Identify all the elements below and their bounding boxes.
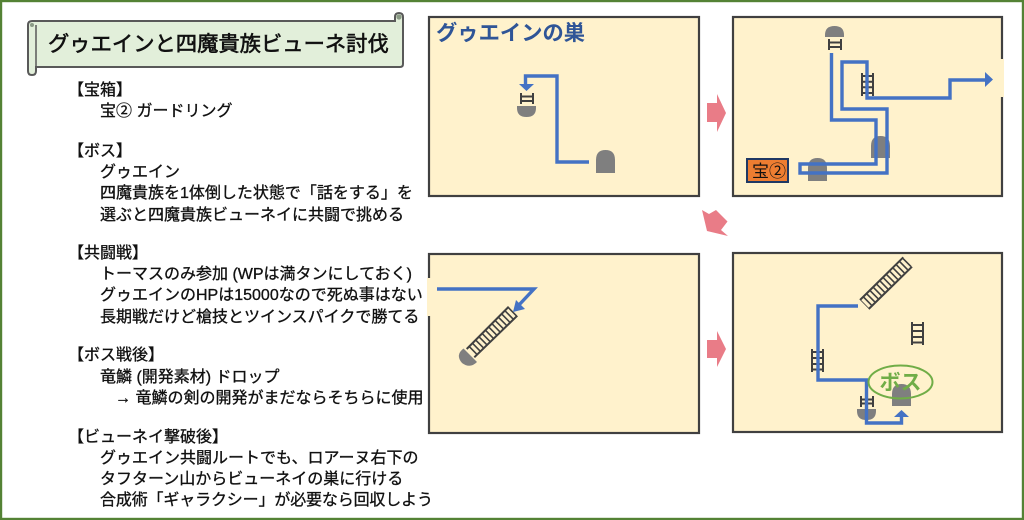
route arrow [818,306,909,423]
text block: joint battle: 【共闘戦】 [68,244,148,262]
icon: diagonal ladder [860,257,912,309]
panel: map 3 [427,254,699,433]
boss callout [868,366,932,398]
text block: treasure: 【宝箱】 [68,81,132,99]
arrow: map 3 to map 4 [707,331,726,367]
text block: after Byunei defeat [68,428,433,509]
text block: after Byunei defeat: タフターン山からビューネイの巣に行ける [100,470,403,488]
text block: boss: グゥエイン [100,163,180,181]
panel: map 2 [733,17,1004,196]
text block: joint battle: トーマスのみ参加 (WPは満タンにしておく) [100,265,412,283]
route arrow [800,53,993,173]
panel: map 4 [733,253,1002,432]
text block: after Byunei defeat: 【ビューネイ撃破後】 [68,428,228,446]
text block: treasure: 宝② ガードリング [100,102,232,120]
icon: dome bottom [857,409,876,420]
boss callout: ボス [880,372,922,394]
panel: map 1 Gwain nest [429,17,699,196]
icon: ladder left [812,349,823,372]
text block: boss: 四魔貴族を1体倒した状態で「話をする」を [100,184,413,202]
text block: after boss battle: 竜鱗 (開発素材) ドロップ [100,368,280,386]
icon: ladder middle [862,73,873,96]
icon: ladder [521,93,533,104]
arrow: map 2 to map 3 [702,210,728,236]
icon: door left [808,158,827,181]
text block: after boss battle [68,346,423,407]
icon: top dome [825,26,844,37]
text block: boss: 【ボス】 [68,142,132,160]
text block: joint battle: グゥエインのHPは15000なので死ぬ事はない [100,286,423,304]
icon: rotated dome [459,348,477,366]
text block: after Byunei defeat: 合成術「ギャラクシー」が必要なら回収しよう [100,491,433,509]
icon: boss door [892,384,911,406]
text block: boss: 選ぶと四魔貴族ビューネイに共闘で挑める [100,206,404,224]
icon: door right [871,136,890,158]
icon: stairs dome [517,106,536,117]
text block: boss [68,142,413,224]
icon: ladder bottom [861,396,873,407]
text block: treasure [68,81,232,120]
text block: joint battle: 長期戦だけど槍技とツインスパイクで勝てる [100,308,419,326]
text block: after Byunei defeat: グゥエイン共闘ルートでも、ロアーヌ右下の [100,449,419,467]
route arrow [519,76,589,162]
treasure label [747,159,788,182]
icon: diagonal ladder [467,307,517,357]
map heading: グゥエインの巣 [436,20,585,45]
title banner scroll [28,13,403,75]
arrow: map 1 to map 2 [707,94,726,132]
text block: after boss battle: → 竜鱗の剣の開発がまだならそちらに使用 [115,389,423,407]
text block: joint battle [68,244,423,326]
text block: after boss battle: 【ボス戦後】 [68,346,164,364]
treasure label: 宝② [752,162,786,181]
icon: ladder right [912,322,923,345]
icon: door [596,150,615,173]
route arrow [437,289,534,312]
title text: グゥエインと四魔貴族ビューネ討伐 [48,32,389,56]
icon: ladder top [829,39,841,50]
